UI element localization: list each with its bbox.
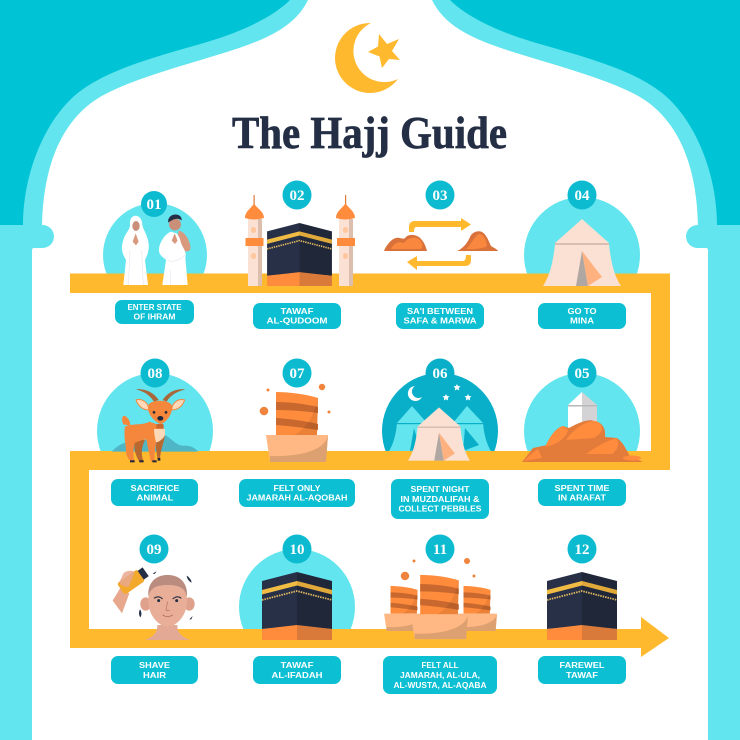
label 10: AL-IFADAH [272, 670, 322, 680]
label 04: GO TO [568, 306, 597, 316]
label 07 [239, 479, 355, 507]
step 09 illustration: shaved head and clipper [113, 566, 195, 640]
number badge 09: 09 [146, 542, 162, 558]
label 10 [253, 656, 341, 684]
label 09 [111, 656, 198, 684]
step 06 illustration: night tents [389, 384, 491, 461]
number badge 04 [568, 180, 596, 210]
clipper and hand [113, 566, 150, 613]
moon and stars [408, 384, 472, 401]
step 12 illustration: Kaaba [547, 572, 617, 640]
timeline path with arrow [70, 274, 670, 657]
label 04: MINA [570, 316, 595, 326]
label 12 [538, 656, 626, 684]
label 06: SPENT NIGHT [410, 484, 470, 494]
white gaps below path [89, 293, 650, 656]
step 08 illustration: goat [112, 389, 198, 462]
left minaret [245, 195, 264, 286]
number badge 09 [140, 534, 168, 564]
side tents [389, 406, 491, 451]
label 09: SHAVE [139, 660, 170, 670]
label 02 [253, 303, 341, 329]
label 06: IN MUZDALIFAH & [400, 494, 480, 504]
label 12: TAWAF [566, 670, 598, 680]
arch: left teal corner [0, 0, 290, 225]
number badge 10 [282, 534, 312, 564]
label 10: TAWAF [280, 660, 314, 670]
number badge 06 [426, 358, 454, 388]
falling hair [139, 571, 193, 619]
number badge 01: 01 [146, 197, 162, 213]
number badge 11 [426, 534, 454, 564]
label 05: IN ARAFAT [558, 492, 607, 502]
label 01: ENTER STATE [128, 302, 182, 312]
number badge 07: 07 [290, 366, 305, 382]
number badge 08: 08 [148, 366, 162, 382]
label 08 [111, 479, 198, 506]
number badge 03: 03 [432, 188, 448, 204]
step 10 illustration: Kaaba [262, 572, 332, 640]
arch: right teal corner [450, 0, 740, 225]
woman in white [122, 216, 149, 285]
number badge 03 [426, 180, 454, 210]
arch: right pill capital [686, 225, 740, 248]
label 11 [383, 656, 497, 694]
label 07: JAMARAH AL-AQOBAH [246, 492, 348, 502]
number badge 01 [141, 191, 167, 217]
label 01 [115, 300, 194, 324]
number badge 08 [140, 358, 170, 388]
label 06 [391, 479, 489, 519]
number badge 12: 12 [574, 542, 590, 558]
label 05 [538, 479, 626, 506]
label 03: SAFA & MARWA [404, 316, 477, 326]
number badge 07 [282, 358, 312, 388]
number badge 02 [282, 180, 312, 210]
number badge 04: 04 [574, 188, 590, 204]
label 04 [538, 303, 626, 329]
icon: crescent and star [335, 23, 400, 93]
label 11: AL-WUSTA, AL-AQABA [394, 680, 487, 690]
label 03: SA'I BETWEEN [407, 306, 473, 316]
number badge 05 [568, 358, 596, 388]
label 09: HAIR [143, 670, 167, 680]
step 01 illustration: pilgrims in ihram [122, 214, 190, 285]
number badge 06: 06 [432, 366, 448, 382]
label 02: AL-QUDOOM [266, 316, 328, 326]
label 12: FAREWEL [560, 660, 605, 670]
head and shoulders [140, 575, 195, 640]
step 07 illustration: single jamarah [266, 392, 328, 462]
title: The Hajj Guide [232, 107, 507, 158]
label 01: OF IHRAM [134, 312, 176, 322]
label 03 [396, 303, 484, 329]
number badge 02: 02 [290, 188, 304, 204]
label 02: TAWAF [280, 306, 314, 316]
step 05 illustration: Arafat hill [522, 392, 643, 462]
label 11: FELT ALL [422, 660, 459, 670]
man in ihram [159, 214, 190, 285]
step 02 illustration: Kaaba with minarets [245, 195, 355, 286]
label 05: SPENT TIME [554, 483, 610, 493]
label 06: COLLECT PEBBLES [398, 504, 482, 514]
number badge 05: 05 [574, 366, 590, 382]
label 08: ANIMAL [136, 492, 174, 502]
step 07 pebbles [260, 384, 330, 415]
step 04 illustration: tent [543, 219, 621, 286]
right minaret [336, 195, 355, 286]
arch: left pill capital [0, 225, 54, 248]
number badge 12 [568, 534, 596, 564]
number badge 11: 11 [433, 542, 447, 558]
backdrop circles [97, 197, 640, 665]
number badge 10: 10 [290, 542, 304, 558]
label 11: JAMARAH, AL-ULA, [400, 670, 480, 680]
label 07: FELT ONLY [274, 483, 321, 493]
step 11 illustration: three jamarat [384, 558, 497, 639]
label 08: SACRIFICE [130, 483, 180, 493]
step 03 illustration: hills and arrows [384, 218, 498, 270]
